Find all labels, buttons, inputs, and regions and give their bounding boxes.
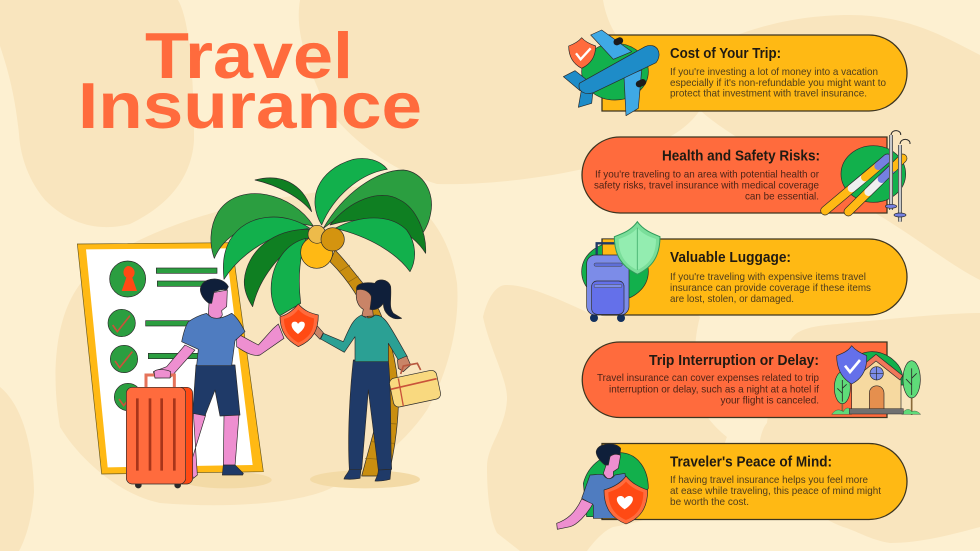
title <box>78 19 422 142</box>
title: Travel <box>145 19 353 92</box>
yellow handbag <box>389 363 442 408</box>
card 3 background <box>602 239 907 315</box>
card 5 body: be worth the cost. <box>670 496 749 508</box>
traveler: man <box>153 279 284 478</box>
card 1 background <box>602 35 907 111</box>
card 3 heading: Valuable Luggage: <box>670 250 791 266</box>
traveler: woman <box>313 280 411 481</box>
suitcase <box>126 370 193 488</box>
icon: house with shield and trees <box>832 346 921 415</box>
card 2 body <box>594 168 819 202</box>
card 1 body: protect that investment with travel insurance. <box>670 88 867 100</box>
card 3 body <box>670 271 871 305</box>
card 2 body: safety risks, travel insurance with medical coverage <box>594 180 819 192</box>
icon: airplane with shield <box>563 30 659 116</box>
card 3 body: If you're traveling with expensive items travel <box>670 271 866 283</box>
card: traveler's peace of mind <box>557 444 907 529</box>
palm tree <box>211 158 432 476</box>
card 5 heading: Traveler's Peace of Mind: <box>670 454 832 470</box>
card 1 heading: Cost of Your Trip: <box>670 46 781 62</box>
card 4 body <box>597 372 819 406</box>
card 2 background <box>582 137 887 213</box>
card 4 heading: Trip Interruption or Delay: <box>649 353 819 369</box>
card 3 body: are lost, stolen, or damaged. <box>670 293 794 305</box>
title: Insurance <box>78 69 422 142</box>
card 4 body: interruption or delay, such as a night at a hotel if <box>609 384 819 396</box>
icon: traveler with shield <box>557 444 648 529</box>
card: valuable luggage <box>582 222 907 322</box>
card 4 body: Travel insurance can cover expenses related to trip <box>597 372 819 384</box>
card 2 body: If you're traveling to an area with potential health or <box>595 168 819 180</box>
card 5 body: If having travel insurance helps you feel more <box>670 474 868 486</box>
card: trip interruption or delay <box>582 342 921 418</box>
card 4 background <box>582 342 887 418</box>
card 5 body: at ease while traveling, this peace of mind might <box>670 485 881 497</box>
card 1 body: If you're investing a lot of money into a vacation <box>670 66 878 78</box>
card 5 background <box>602 444 907 520</box>
card 2 body: can be essential. <box>745 190 819 202</box>
card 2 heading: Health and Safety Risks: <box>662 148 820 164</box>
card 4 body: your flight is canceled. <box>720 394 819 406</box>
icon: skis and poles <box>825 131 910 222</box>
icon: luggage with shield <box>582 222 660 322</box>
main illustration: checklist, palm tree and travelers <box>77 158 442 488</box>
card 3 body: insurance can provide coverage if these items <box>670 282 871 294</box>
card 1 body <box>670 66 886 100</box>
card 1 body: especially if it's non-refundable you might want to <box>670 77 886 89</box>
shield with heart <box>280 304 318 347</box>
card: cost of your trip <box>563 30 907 116</box>
card: health and safety risks <box>582 131 910 222</box>
card 5 body <box>670 474 881 508</box>
ground shadows <box>182 470 420 488</box>
checklist document <box>77 243 263 474</box>
